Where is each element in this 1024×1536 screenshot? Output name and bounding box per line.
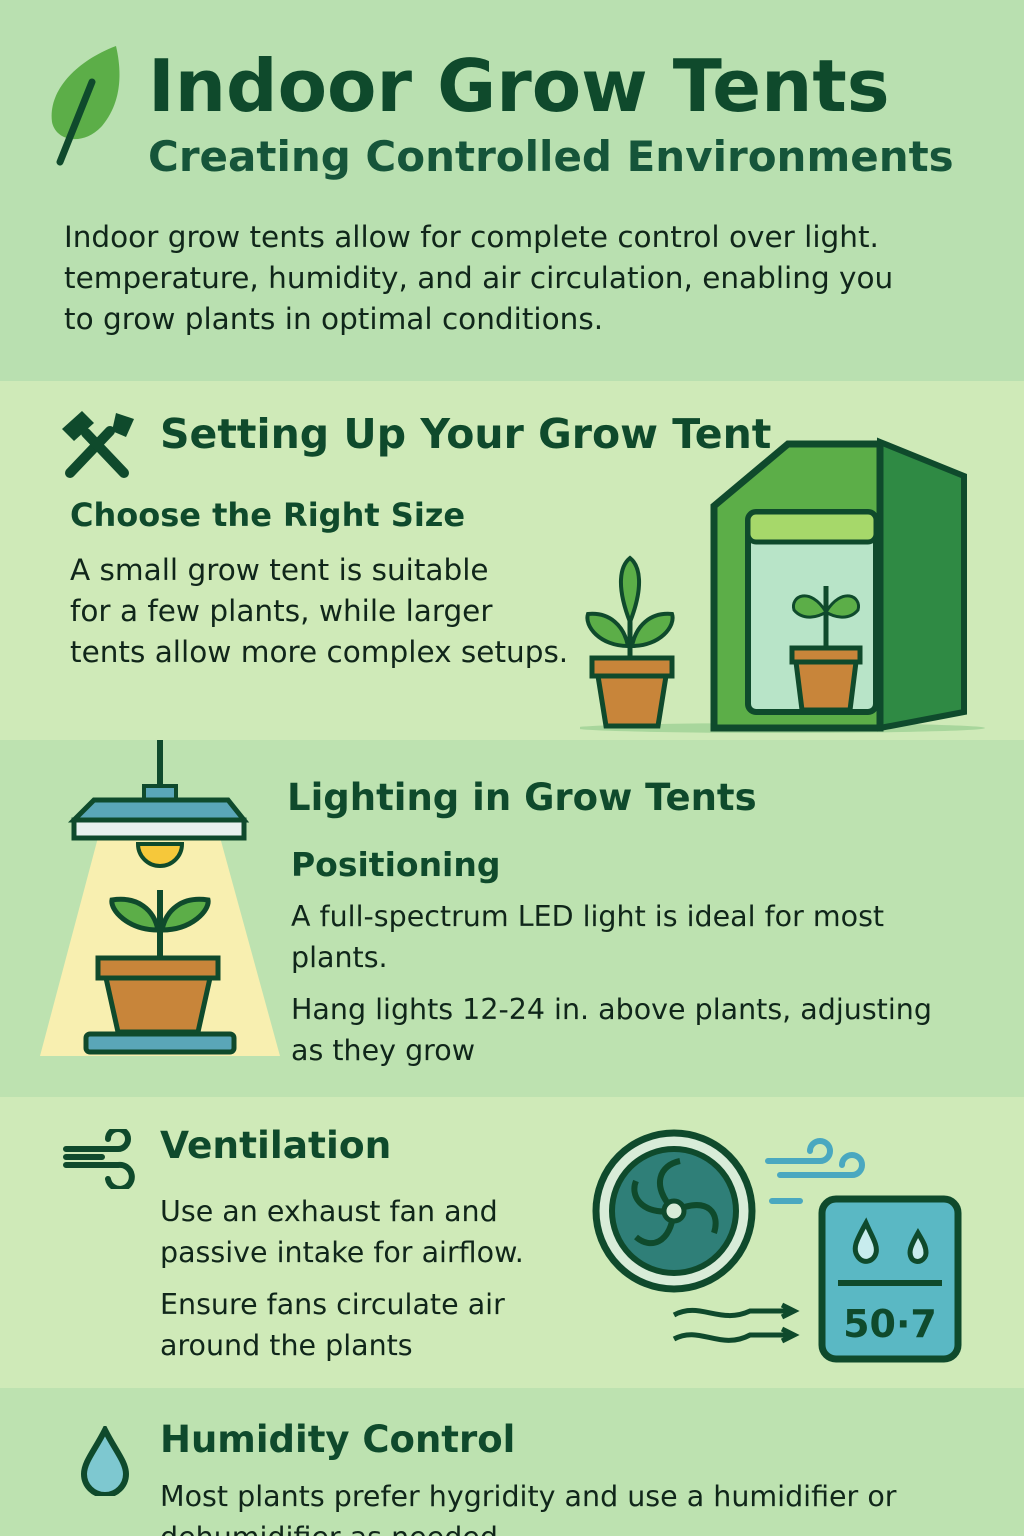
text xyxy=(291,900,884,974)
panel: header xyxy=(0,0,1024,381)
illustration: tent and pot xyxy=(580,438,985,733)
intro text: to grow plants in optimal conditions. xyxy=(64,302,603,336)
text: for a few plants, while larger xyxy=(70,594,492,628)
panel: humidity xyxy=(0,1388,1024,1536)
text: Use an exhaust fan and xyxy=(160,1195,498,1228)
icon: tools xyxy=(62,411,134,478)
intro text: Indoor grow tents allow for complete control over light. xyxy=(64,220,879,254)
subheading: Positioning xyxy=(291,845,500,884)
panel: setting up xyxy=(0,381,1024,740)
intro text: temperature, humidity, and air circulation, enabling you xyxy=(64,261,893,295)
intro text xyxy=(64,220,893,336)
title: Indoor Grow Tents xyxy=(148,44,890,128)
text xyxy=(160,1195,524,1269)
icon: leaf xyxy=(52,46,120,166)
text xyxy=(160,1288,505,1362)
subtitle: Creating Controlled Environments xyxy=(148,132,954,181)
text: Most plants prefer hygridity and use a humidifier or xyxy=(160,1480,896,1513)
text xyxy=(70,553,568,669)
text: tents allow more complex setups. xyxy=(70,635,568,669)
illustration: grow light xyxy=(40,740,280,1056)
text: Ensure fans circulate air xyxy=(160,1288,505,1321)
text: as they grow xyxy=(291,1034,475,1067)
heading: Ventilation xyxy=(160,1123,391,1167)
subheading: Choose the Right Size xyxy=(70,496,465,534)
text: plants. xyxy=(291,941,388,974)
illustration: fan and hygrometer xyxy=(592,1130,962,1362)
panel: ventilation xyxy=(0,1097,1024,1388)
icon: wind xyxy=(63,1129,135,1189)
text: around the plants xyxy=(160,1329,413,1362)
icon: drop xyxy=(81,1426,129,1496)
heading: Lighting in Grow Tents xyxy=(287,776,757,819)
illustration: fan and hygrometer: 50·7 xyxy=(843,1302,937,1346)
text: passive intake for airflow. xyxy=(160,1236,524,1269)
heading: Setting Up Your Grow Tent xyxy=(160,410,771,458)
text xyxy=(291,993,932,1067)
text: A small grow tent is suitable xyxy=(70,553,489,587)
heading: Humidity Control xyxy=(160,1418,515,1461)
text xyxy=(160,1480,896,1536)
text: Hang lights 12-24 in. above plants, adjusting xyxy=(291,993,932,1026)
panel: lighting xyxy=(0,740,1024,1097)
text: A full-spectrum LED light is ideal for most xyxy=(291,900,884,933)
